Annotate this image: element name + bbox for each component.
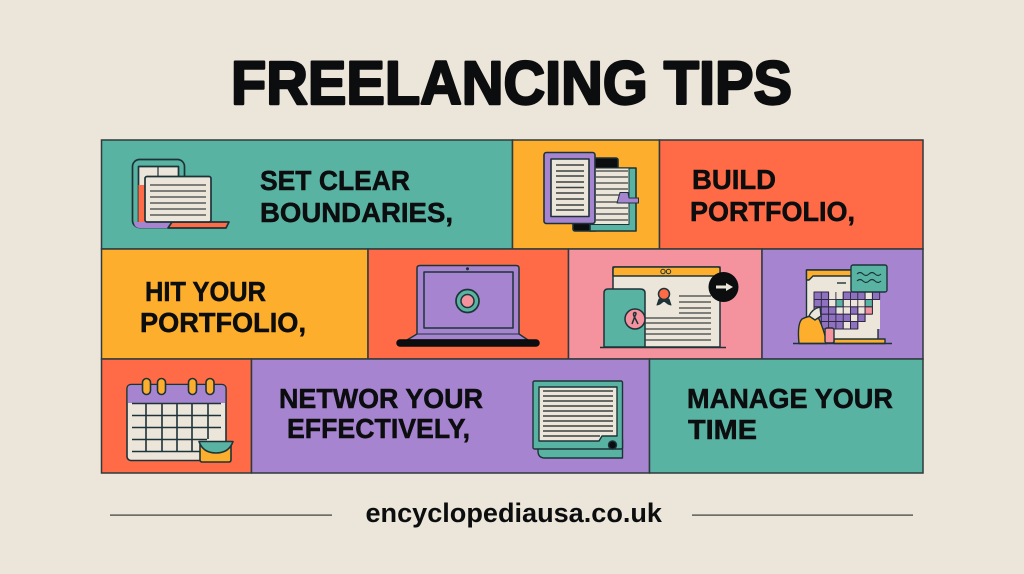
text: manage your time (687, 383, 893, 445)
footer: right rule (692, 514, 913, 516)
text: hit your portfolio: PORTFOLIO, (140, 307, 306, 338)
text: manage your time: MANAGE YOUR (687, 383, 893, 414)
panel: set clear boundaries (102, 140, 512, 249)
text: manage your time: TIME (688, 414, 757, 445)
text: build portfolio: PORTFOLIO, (690, 196, 855, 227)
footer: left rule (110, 514, 332, 516)
text: set clear boundaries (260, 165, 453, 228)
icon: laptop (397, 266, 539, 346)
icon: person at calendar screen (793, 265, 892, 344)
text: hit your portfolio: HIT YOUR (145, 276, 266, 307)
icon: laptop with document (132, 160, 229, 228)
text: network effectively: NETWOR YOUR (279, 383, 483, 414)
panel: network effectively (252, 359, 650, 473)
title: FREELANCING TIPS (231, 49, 792, 117)
panel: calendar icon (102, 359, 252, 473)
text: hit your portfolio (140, 276, 306, 338)
panel: documents icon (512, 140, 660, 249)
text: set clear boundaries: BOUNDARIES, (260, 197, 453, 228)
text: build portfolio (690, 164, 855, 227)
panel: build portfolio (660, 140, 923, 249)
panel: laptop icon (368, 249, 568, 359)
icon: tablet with document (533, 381, 622, 458)
text: set clear boundaries: SET CLEAR (260, 165, 410, 196)
text: network effectively (279, 383, 483, 444)
text: build portfolio: BUILD (692, 164, 776, 195)
icon: certificate window (600, 267, 738, 348)
panel: manage your time (650, 359, 923, 473)
footer: website: encyclopediausa.co.uk (366, 498, 663, 528)
text: network effectively: EFFECTIVELY, (287, 413, 470, 444)
panel: calendar screen icon (762, 249, 923, 359)
panel: certificate icon (568, 249, 762, 359)
panel: hit your portfolio (102, 249, 368, 359)
icon: calendar with envelope (127, 378, 233, 462)
icon: stacked documents (544, 152, 638, 231)
